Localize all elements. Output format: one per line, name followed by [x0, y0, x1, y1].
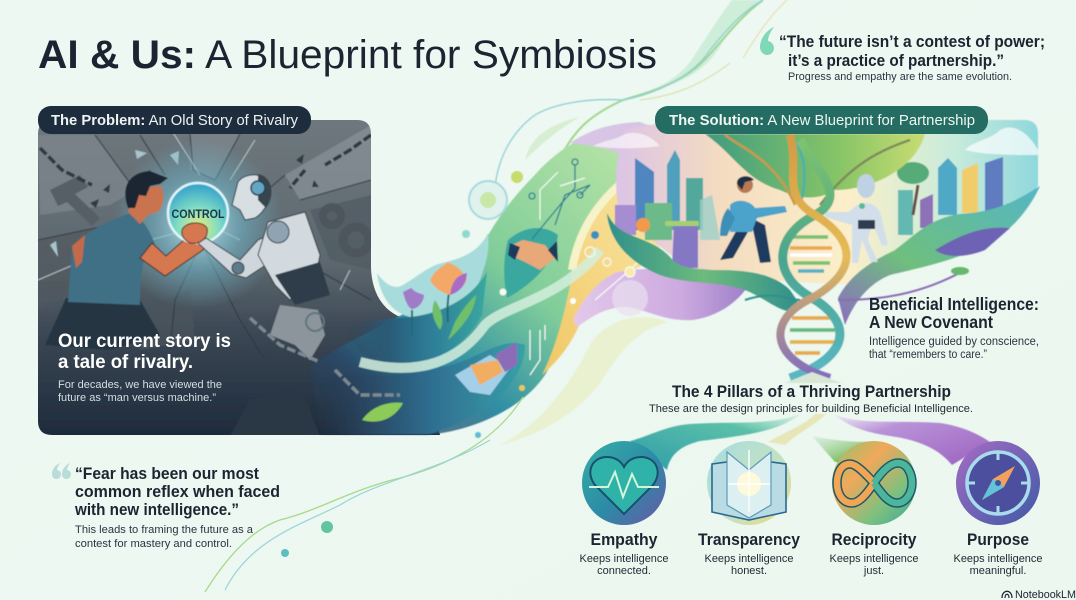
transparency text line 2: honest.: [731, 565, 767, 577]
target ring icon: [469, 181, 507, 219]
translucent chip: [612, 280, 648, 316]
ribbon: lilac dome: [570, 122, 660, 170]
top quote: [760, 27, 1045, 83]
pillar connector flows: [630, 414, 990, 470]
icon: open book: [707, 441, 791, 525]
problem body: For decades, we have viewed the: [58, 379, 222, 391]
beneficial body line 2: that “remembers to care.”: [869, 349, 987, 361]
pillar: empathy: [580, 441, 668, 577]
purpose text line 2: meaningful.: [970, 565, 1026, 577]
decorative top swoosh: [495, 0, 787, 187]
reciprocity text: Keeps intelligence: [830, 553, 918, 565]
quote subtext: Progress and empathy are the same evolution.: [788, 71, 1012, 83]
clasped hands: [182, 223, 207, 243]
empathy text line 2: connected.: [597, 565, 651, 577]
man: head: [128, 186, 163, 224]
robot: arm: [197, 236, 264, 279]
orb: [168, 183, 228, 243]
land left: [607, 213, 800, 311]
robot: torso: [258, 212, 320, 300]
beneficial intelligence text: [869, 294, 1039, 361]
beneficial body: Intelligence guided by conscience,: [869, 336, 1039, 348]
quote sub line 1: This leads to framing the future as a: [75, 524, 254, 536]
beneficial heading line 2: A New Covenant: [869, 312, 993, 332]
dna helix: [745, 135, 847, 378]
tree crown: [705, 134, 925, 198]
person: [720, 176, 787, 263]
ribbon: dark teal flower bed: [345, 272, 487, 367]
ribbon: light teal wave: [377, 233, 489, 317]
reciprocity label: Reciprocity: [832, 531, 917, 549]
dark foreground rubble: [231, 420, 320, 435]
chains upper: [40, 135, 371, 188]
quote sub line 2: contest for mastery and control.: [75, 538, 232, 550]
leaf green: [362, 403, 403, 422]
man: hair: [125, 171, 168, 208]
robot: head: [232, 175, 270, 220]
panel: the problem illustration: [30, 115, 460, 441]
shards: [90, 154, 319, 208]
ribbon: cream stripe: [572, 160, 655, 270]
lower-left flowing lines: [205, 397, 523, 592]
title: AI & Us: A Blueprint for Symbiosis: [38, 33, 657, 77]
heading pill: problem: The Problem: An Old Story of Rivalry: [51, 112, 298, 129]
man: arm: [139, 240, 204, 277]
ribbon: pale lower wisps: [500, 317, 668, 445]
fade at dna base: [785, 372, 842, 383]
icon: orange flower: [636, 218, 650, 232]
clouds: [593, 133, 660, 148]
icon: quote mark: [760, 27, 774, 55]
quote text line 2: it’s a practice of partnership.”: [788, 51, 1004, 70]
reciprocity text line 2: just.: [863, 565, 884, 577]
quote text: “The future isn’t a contest of power;: [779, 32, 1045, 51]
pillars subheading: These are the design principles for building Beneficial Intelligence.: [649, 403, 973, 415]
problem heading: Our current story is: [58, 330, 231, 352]
icon: heart: [582, 441, 666, 525]
ribbon: yellow band: [542, 155, 660, 375]
pillars heading: The 4 Pillars of a Thriving Partnership: [672, 382, 951, 401]
city right: [897, 157, 1003, 235]
icon: compass: [956, 441, 1040, 525]
circuits: [529, 159, 590, 239]
purpose label: Purpose: [967, 531, 1029, 549]
gears: [323, 207, 369, 253]
ribbon: main gradient: [310, 125, 655, 435]
problem heading line 2: a tale of rivalry.: [58, 351, 193, 373]
hammer silhouette: [50, 175, 100, 226]
chain lower: [250, 318, 400, 395]
robot: leg: [270, 305, 325, 360]
glow behind orb: [122, 146, 276, 305]
orb label: CONTROL: [172, 207, 225, 221]
quote line 1: “Fear has been our most: [75, 465, 259, 483]
quote line 3: with new intelligence.”: [74, 501, 239, 519]
problem body line 2: future as “man versus machine.”: [58, 392, 216, 404]
pillar: reciprocity: [830, 441, 918, 577]
lower-left quote: [52, 463, 280, 550]
heading pill: solution: The Solution: A New Blueprint for Partnership: [669, 112, 975, 129]
heading pill: solution: [655, 106, 988, 134]
problem text: [58, 330, 231, 404]
handshake upper: [508, 240, 558, 270]
heading pill: problem: [38, 106, 311, 134]
pillar: transparency: [698, 441, 801, 577]
handshake lower: [455, 342, 517, 395]
robot small: [825, 174, 888, 263]
empathy text: Keeps intelligence: [580, 553, 668, 565]
transparency label: Transparency: [698, 531, 801, 549]
man: back arm: [72, 235, 85, 268]
flowing ribbon between panels: [250, 122, 753, 445]
quote line 2: common reflex when faced: [75, 483, 280, 501]
city left: [615, 150, 720, 268]
tulips: [403, 262, 476, 340]
transparency text: Keeps intelligence: [704, 553, 794, 565]
icon: quote mark: [52, 463, 71, 479]
land right: [838, 186, 1040, 325]
beneficial heading: Beneficial Intelligence:: [869, 294, 1039, 314]
purpose text: Keeps intelligence: [954, 553, 1042, 565]
sky: [616, 120, 1038, 285]
empathy label: Empathy: [590, 531, 658, 549]
robot: shoulder: [267, 221, 289, 243]
pillar: purpose: [954, 441, 1042, 577]
tree branch right: [838, 270, 965, 300]
ribbon: teal handshake field: [504, 228, 558, 298]
dots: [462, 171, 599, 438]
icon: infinity loop: [832, 441, 916, 525]
dna rungs: [790, 237, 835, 353]
ribbon: pale strand: [360, 250, 600, 368]
panel: the solution illustration: [593, 120, 1040, 383]
ribbon: lower teal: [320, 343, 525, 435]
man: shirt: [68, 212, 155, 305]
cracked wall: [38, 125, 371, 350]
man: legs: [45, 298, 160, 350]
ribbon: lilac lower: [573, 269, 753, 327]
